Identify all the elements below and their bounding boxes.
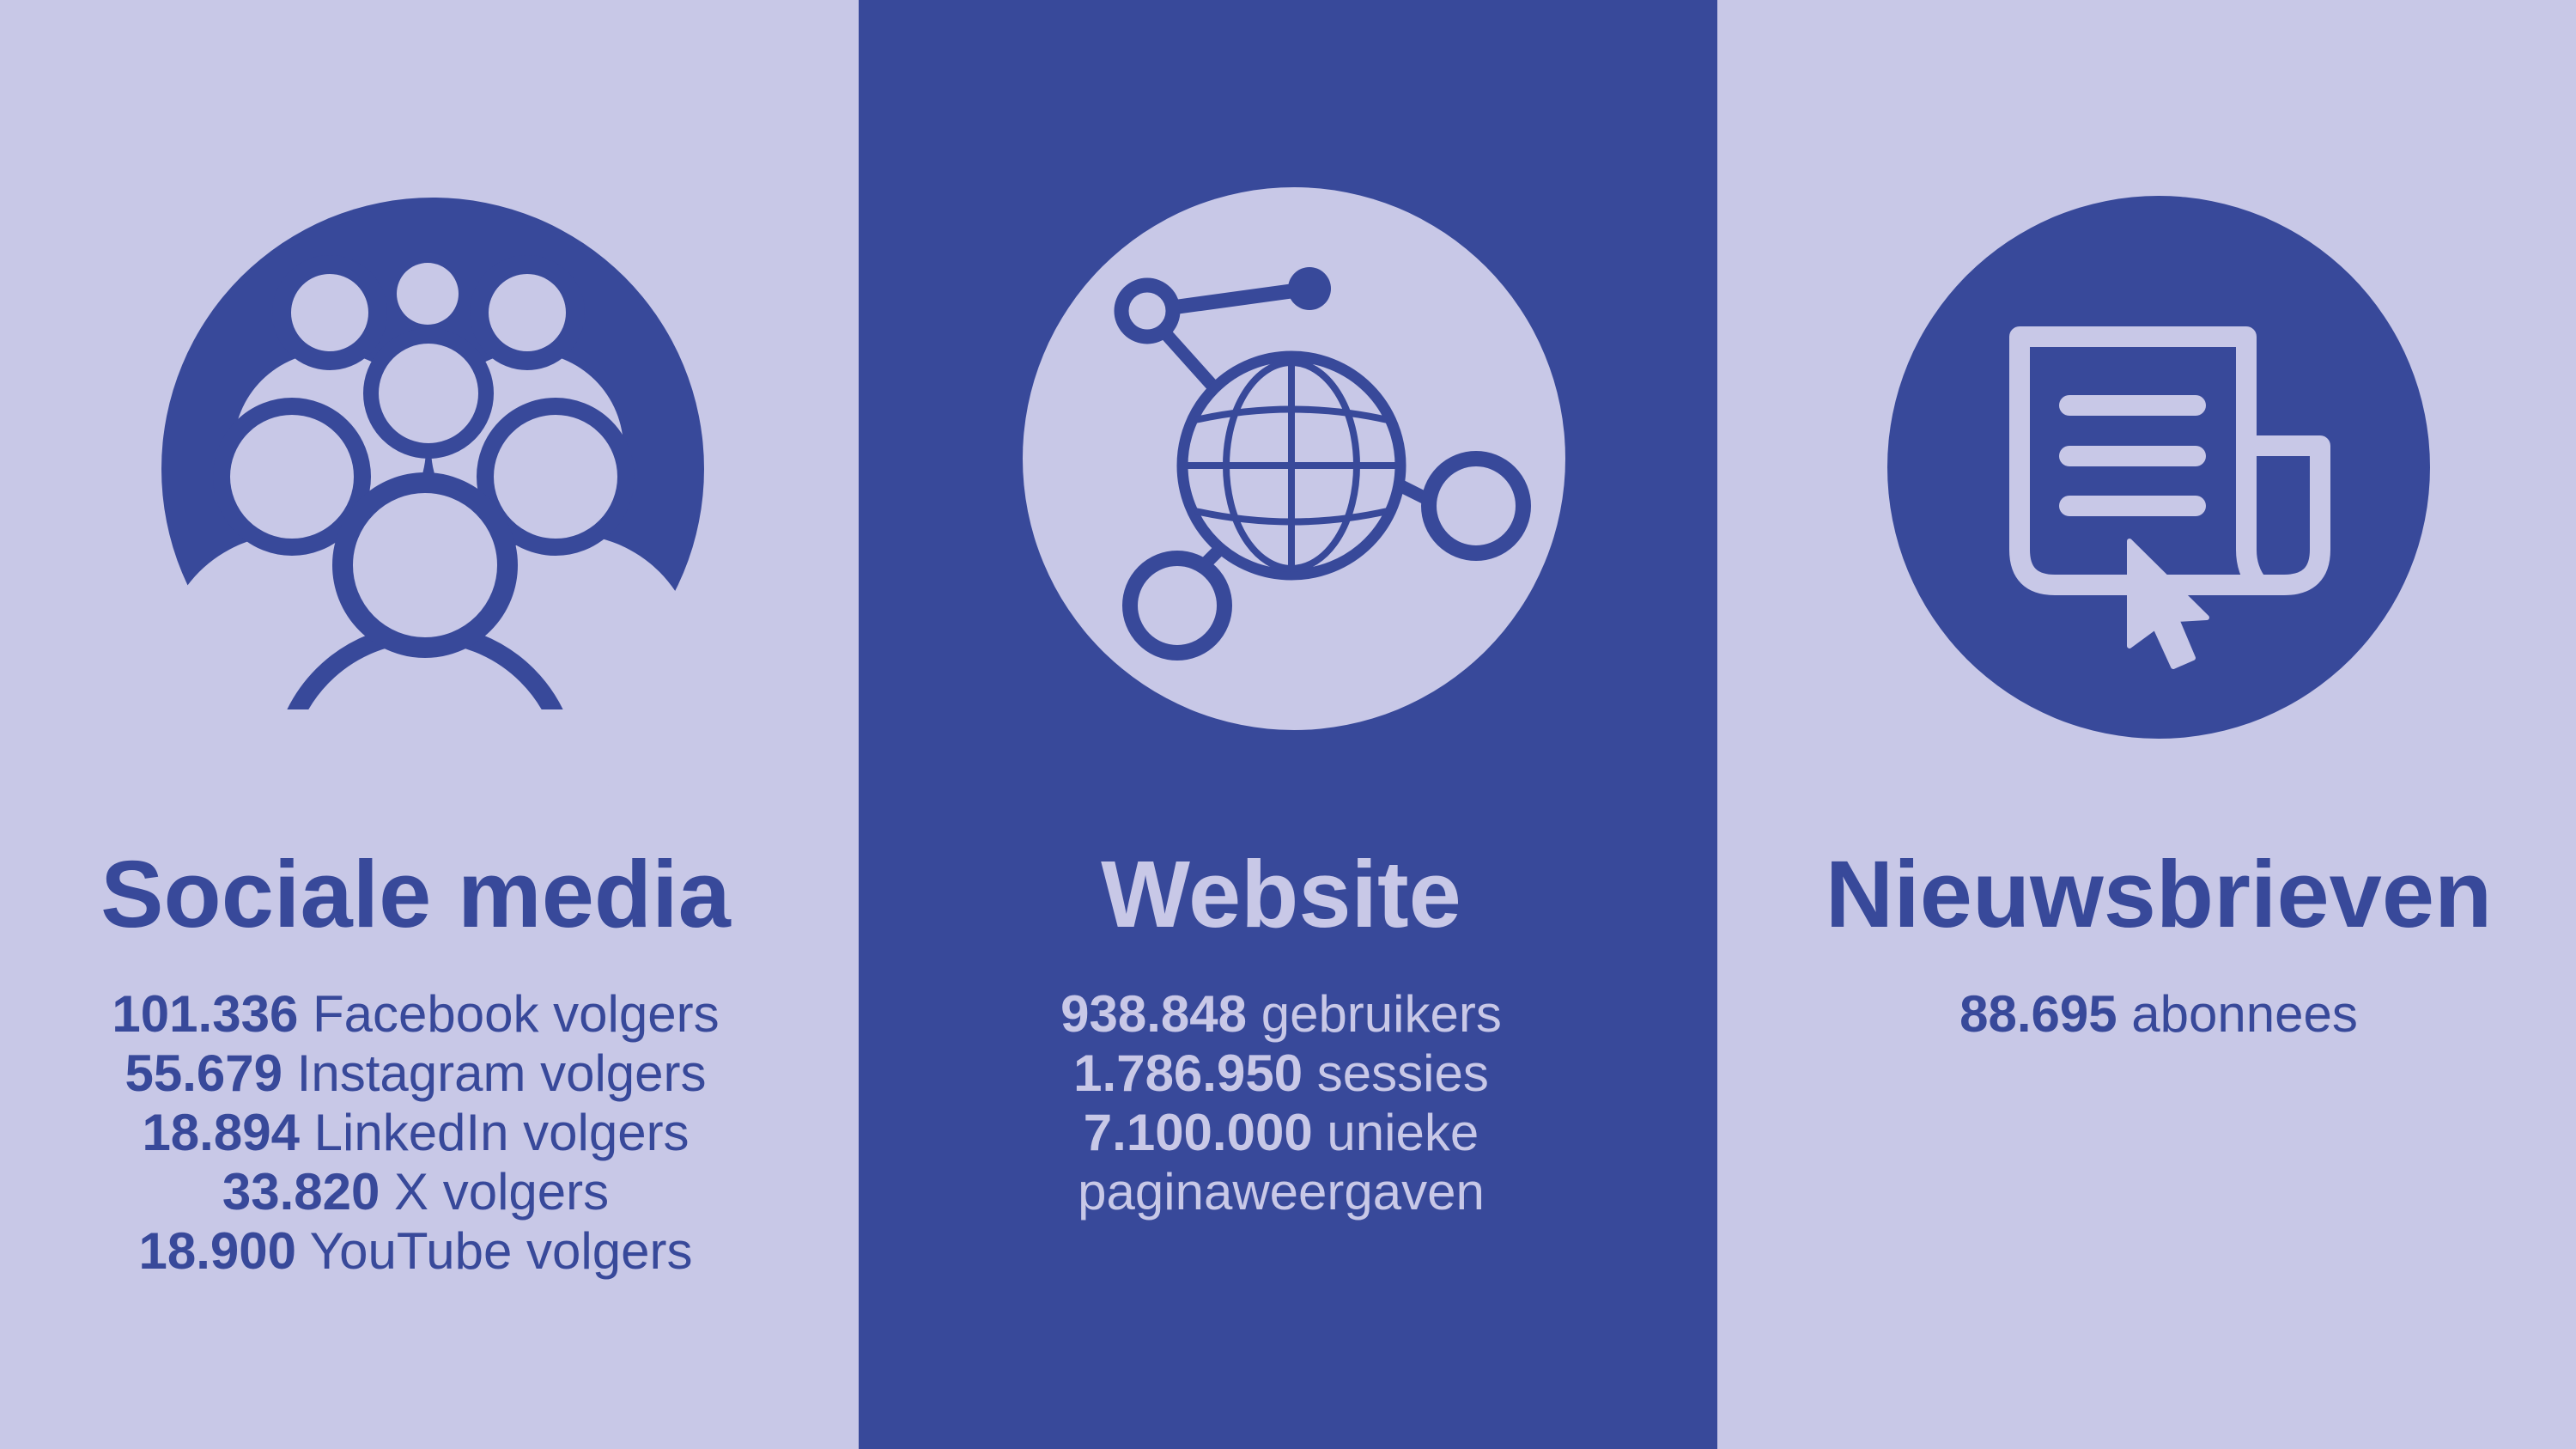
text block: social media stats: 101.336 Facebook volgers	[112, 985, 720, 1043]
text block: website stats	[1060, 985, 1502, 1221]
text block: social media stats: 33.820 X volgers	[222, 1163, 609, 1221]
heading: Sociale media: Sociale media	[100, 842, 732, 947]
text block: newsletter stats: 88.695 abonnees	[1959, 985, 2358, 1043]
icon: social media people	[161, 198, 704, 709]
icon: newsletter with cursor	[1887, 196, 2430, 739]
heading: Website: Website	[1101, 842, 1461, 947]
panel: website background	[859, 0, 1717, 1449]
text block: social media stats: 18.900 YouTube volgers	[139, 1222, 692, 1280]
text block: website stats: paginaweergaven	[1078, 1163, 1485, 1221]
icon: website globe network	[1023, 187, 1565, 730]
text block: social media stats: 55.679 Instagram volgers	[125, 1044, 707, 1102]
text block: social media stats: 18.894 LinkedIn volgers	[142, 1104, 690, 1161]
text block: website stats: 1.786.950 sessies	[1073, 1044, 1489, 1102]
text block: website stats: 938.848 gebruikers	[1060, 985, 1502, 1043]
text block: social media stats	[112, 985, 720, 1280]
text block: website stats: 7.100.000 unieke	[1084, 1104, 1479, 1161]
heading: Nieuwsbrieven: Nieuwsbrieven	[1826, 842, 2492, 947]
